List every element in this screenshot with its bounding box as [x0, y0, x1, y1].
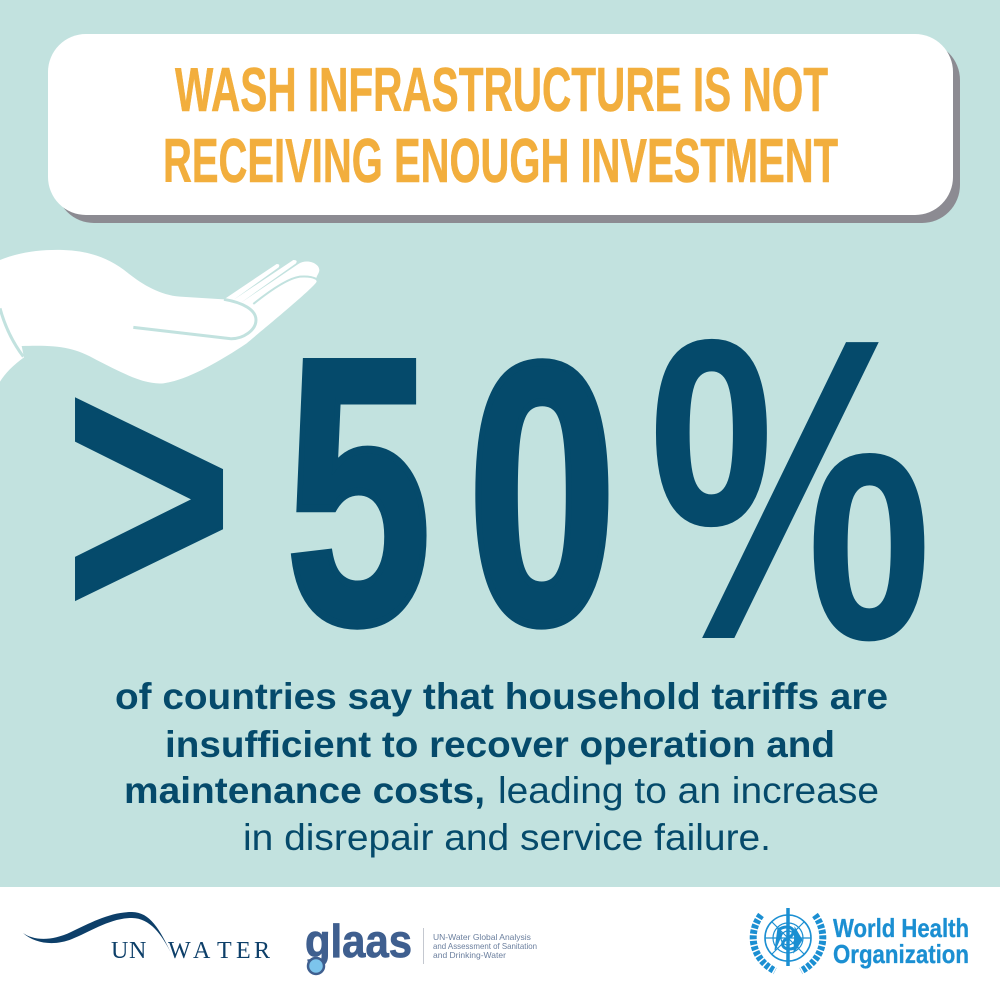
description text: leading to an increase — [498, 770, 879, 811]
logo: UN-Water: UN — [111, 938, 146, 964]
digit 0: 0 — [468, 286, 617, 701]
logo: GLAAS — [305, 915, 537, 974]
logo: World Health Organization: Organization — [833, 939, 969, 969]
logo: GLAAS: glaas — [305, 915, 412, 967]
description text: in disrepair and service failure. — [243, 817, 771, 858]
emblem — [753, 908, 823, 971]
logo: World Health Organization — [753, 908, 969, 971]
GLAAS descriptor: and Drinking-Water — [433, 950, 506, 960]
percent sign: % — [648, 250, 933, 730]
footer band — [0, 887, 1000, 1000]
logo: UN-Water — [23, 912, 270, 964]
GLAAS descriptor: UN-Water Global Analysis — [433, 932, 531, 942]
GLAAS descriptor: and Assessment of Sanitation — [433, 941, 537, 951]
greater-than sign: > — [64, 288, 234, 700]
digit 5: 5 — [286, 280, 431, 702]
logo: UN-Water: WATER — [168, 938, 270, 964]
logo: World Health Organization: World Health — [833, 913, 969, 943]
description text: of countries say that household tariffs are — [115, 676, 888, 717]
big statistic — [64, 250, 933, 730]
title text — [163, 56, 838, 196]
GLAAS descriptor — [433, 932, 537, 960]
description text: maintenance costs, — [124, 770, 485, 811]
title banner — [48, 34, 960, 223]
description text — [115, 676, 888, 858]
icon: open hand — [0, 250, 319, 383]
description text: insufficient to recover operation and — [165, 724, 835, 765]
